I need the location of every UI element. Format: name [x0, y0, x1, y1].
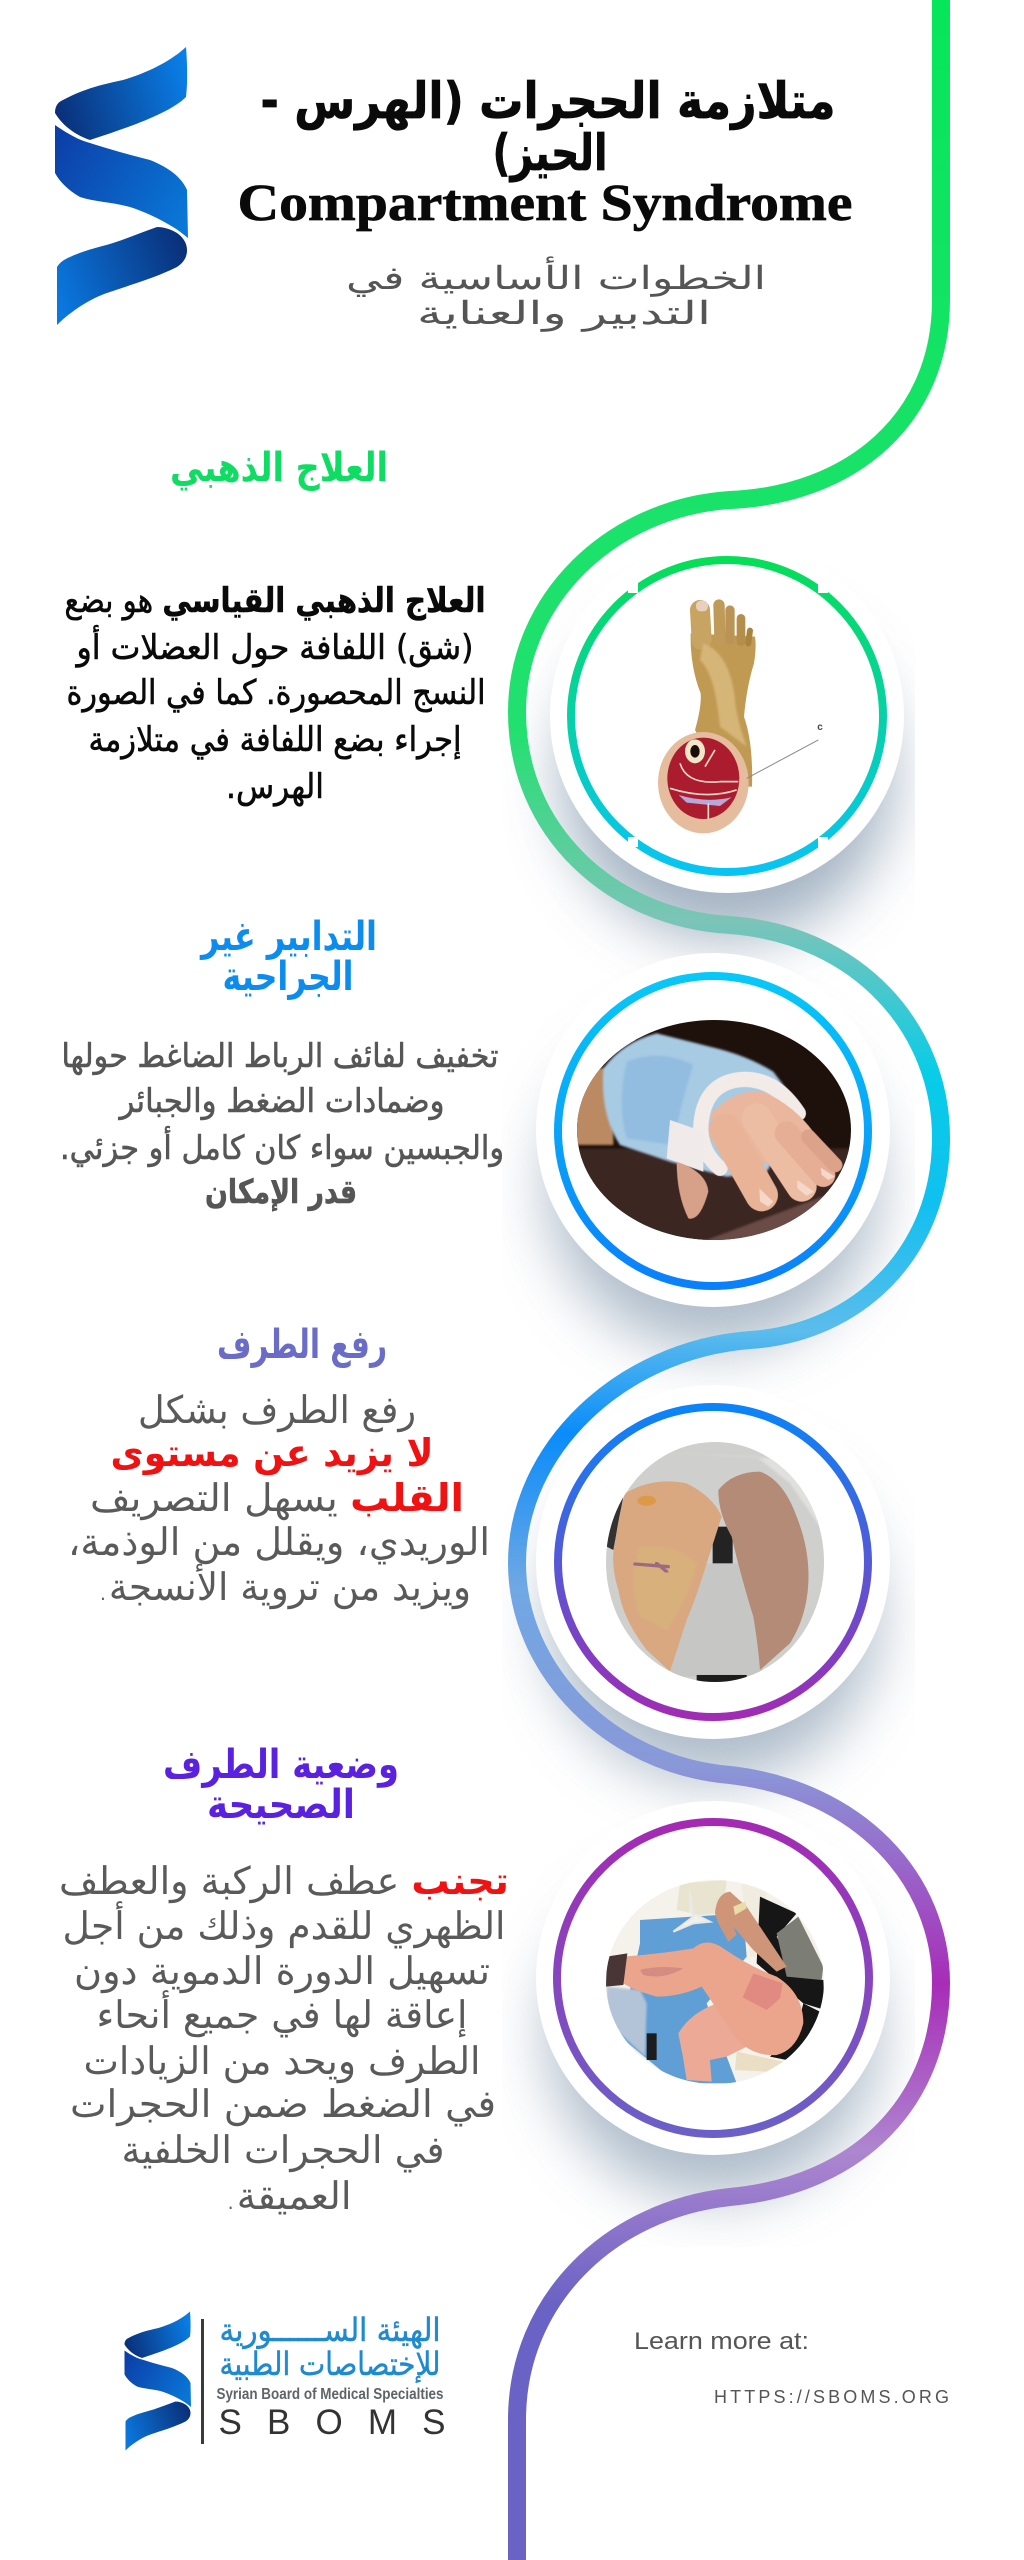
text block: elevation: لا يزيد عن مستوى [110, 1431, 434, 1475]
heading: correct limb position [163, 1742, 399, 1828]
photo: patient sitting with leg scars [606, 1880, 824, 2084]
panel: circle 4 seated patient [536, 1801, 890, 2155]
footer logo [124, 2311, 446, 2450]
text block: correct position: في الضغط ضمن الحجرات [70, 2082, 496, 2127]
text block: gold standard: العلاج الذهبي القياسي هو بضع [64, 581, 485, 621]
text block: non-surgical: قدر الإمكان [205, 1172, 357, 1211]
subtitle: الخطوات الأساسية في [346, 256, 766, 297]
text block: gold standard: (شق) اللفافة حول العضلات أو [75, 625, 474, 668]
text block: non-surgical [60, 1036, 504, 1211]
icon notches [628, 583, 828, 847]
foot illustration: c [817, 722, 823, 733]
text block: correct position [59, 1859, 509, 2218]
text block: non-surgical: تخفيف لفائف الرباط الضاغط حولها [62, 1036, 498, 1075]
photo: child's hand in cast [577, 1020, 851, 1240]
icon: SBOMS ribbon [124, 2312, 191, 2450]
text block: correct position: العميقة. [224, 2174, 352, 2218]
text block: elevation [68, 1388, 490, 1610]
text block: non-surgical: وضمادات الضغط والجبائر [118, 1081, 445, 1120]
text block: gold standard: النسج المحصورة. كما في الصورة [66, 673, 486, 713]
text block: elevation: ويزيد من تروية الأنسجة. [97, 1563, 471, 1610]
subtitle [346, 256, 766, 332]
title [238, 72, 852, 232]
panel: circle 1 foot anatomy [550, 539, 904, 893]
url: HTTPS://SBOMS.ORG [714, 2387, 949, 2407]
subtitle: التدبير والعناية [417, 294, 711, 332]
text block: elevation: الوريدي، ويقلل من الوذمة، [68, 1520, 490, 1565]
heading: non-surgical measures: التدابير غير [199, 914, 377, 960]
title: الحيز) [492, 124, 608, 183]
logo: top ribbon S [55, 47, 188, 325]
text block: elevation: رفع الطرف بشكل [138, 1388, 416, 1433]
text block: correct position: تجنب عطف الركبة والعطف [59, 1859, 509, 1904]
learn more text: Learn more at: [634, 2328, 809, 2355]
photo: swollen leg compared to normal leg [606, 1442, 824, 1682]
footer logo: للإختصاصات الطبية [220, 2345, 440, 2383]
heading: limb elevation: رفع الطرف [217, 1322, 387, 1368]
heading: non-surgical measures [199, 914, 377, 1000]
text block: gold standard: إجراء بضع اللفافة في متلازمة [88, 720, 462, 760]
heading: gold standard treatment: العلاج الذهبي [170, 445, 388, 491]
text block: elevation: القلب يسهل التصريف [90, 1476, 464, 1521]
panel: circle 3 legs [536, 1385, 890, 1739]
foot illustration [658, 601, 823, 833]
timeline curve [517, 0, 941, 2560]
footer logo: SBOMS [218, 2403, 446, 2442]
text block: correct position: الطرف ويحد من الزيادات [84, 2039, 480, 2084]
footer logo: Syrian Board of Medical Specialties [216, 2386, 444, 2403]
heading: correct limb position: الصحيحة [207, 1782, 355, 1828]
drop shadows behind circles [548, 610, 892, 2198]
text block: correct position: إعاقة لها في جميع أنحاء [96, 1990, 468, 2038]
text block: non-surgical: والجبسين سواء كان كامل أو جزئي. [60, 1126, 504, 1167]
text block: gold standard [64, 581, 485, 807]
panel: circle 2 hand in cast [536, 953, 890, 1307]
heading: correct limb position: وضعية الطرف [163, 1742, 399, 1788]
footer logo: الهيئة الســــــورية [220, 2311, 440, 2349]
title: متلازمة الحجرات (الهرس - [260, 72, 836, 131]
heading: non-surgical measures: الجراحية [222, 954, 354, 1000]
title: Compartment Syndrome [238, 175, 852, 232]
text block: correct position: الظهري للقدم وذلك من أجل [62, 1901, 506, 1949]
text block: correct position: تسهيل الدورة الدموية دون [74, 1949, 490, 1994]
text block: correct position: في الحجرات الخلفية [122, 2128, 444, 2173]
text block: gold standard: الهرس. [226, 767, 324, 807]
